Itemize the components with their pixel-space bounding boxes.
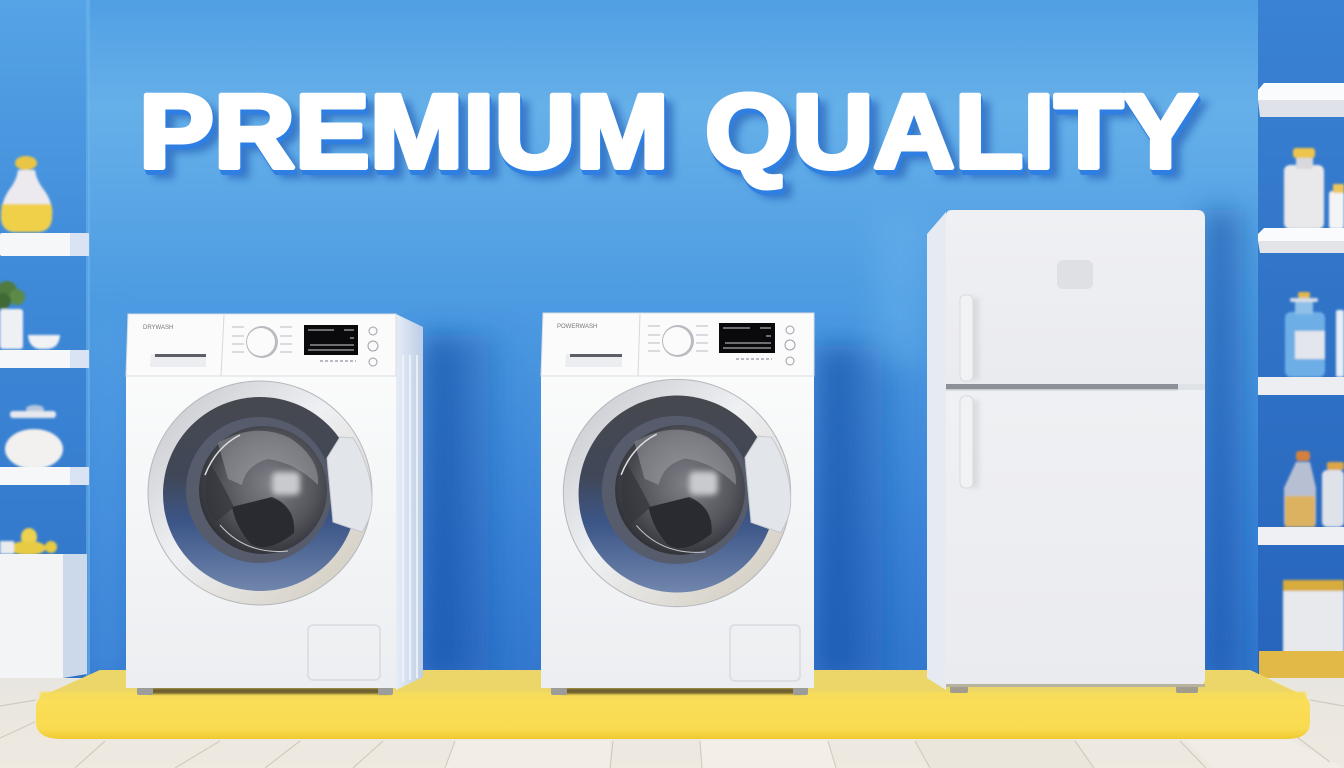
right shelving alcove <box>1258 0 1344 680</box>
title: PREMIUM <box>139 74 669 190</box>
door <box>148 381 372 605</box>
feet <box>950 684 1198 693</box>
floor <box>0 678 1344 768</box>
door <box>563 379 791 607</box>
shelf 3 <box>1258 377 1344 395</box>
title <box>139 74 1207 199</box>
badge <box>1057 260 1093 289</box>
shelf 2 <box>1258 228 1344 253</box>
dial <box>662 325 694 357</box>
washing machine left <box>126 314 423 695</box>
white box with amber lid <box>1283 580 1344 657</box>
control panel: DRYWASH <box>143 325 173 331</box>
icon: small bowl <box>28 335 60 349</box>
upper door <box>946 210 1205 384</box>
front body <box>126 376 396 688</box>
feet <box>137 687 393 695</box>
lower door <box>946 390 1205 686</box>
shelf 4 <box>1258 527 1344 545</box>
side panel <box>927 212 946 690</box>
icon: lidded jar <box>5 405 63 469</box>
title: QUALITY <box>706 76 1199 193</box>
detergent drawer <box>150 354 206 367</box>
icon: potted plant <box>0 281 25 349</box>
icon: blue bottles <box>1285 292 1344 377</box>
left shelving alcove <box>0 0 90 680</box>
title: QUALITY <box>714 82 1207 199</box>
cabinet <box>0 554 87 678</box>
service hatch <box>308 625 380 680</box>
dial <box>246 326 278 358</box>
icon: amber bottles <box>1284 451 1344 527</box>
contact shadow <box>562 688 802 694</box>
shelf 1 <box>0 233 89 256</box>
title: PREMIUM <box>141 78 671 196</box>
washing machine centre <box>541 313 814 695</box>
control panel: POWERWASH <box>557 324 597 330</box>
front body <box>541 376 814 688</box>
title: PREMIUM <box>148 82 678 199</box>
feet <box>551 687 808 695</box>
handles <box>960 295 979 381</box>
title: QUALITY <box>705 74 1198 190</box>
detergent drawer <box>565 354 622 367</box>
control panel <box>126 314 396 376</box>
title: QUALITY <box>707 78 1200 196</box>
display <box>719 323 775 353</box>
icon: yellow vase <box>1 156 52 232</box>
icon: yellow ornaments <box>0 528 57 555</box>
shelf 2 <box>0 350 89 368</box>
display <box>304 325 358 355</box>
title: PREMIUM <box>140 76 670 193</box>
control panel <box>541 313 814 376</box>
refrigerator <box>927 210 1205 693</box>
icon: white bottles <box>1284 148 1344 229</box>
amber plinth <box>1259 651 1344 680</box>
side panel <box>396 314 423 690</box>
shelf top <box>1258 83 1344 117</box>
contact shadow <box>150 688 390 694</box>
service hatch <box>730 625 800 681</box>
door gap <box>946 384 1205 390</box>
yellow platform <box>36 670 1310 739</box>
shelf 3 <box>0 467 89 485</box>
